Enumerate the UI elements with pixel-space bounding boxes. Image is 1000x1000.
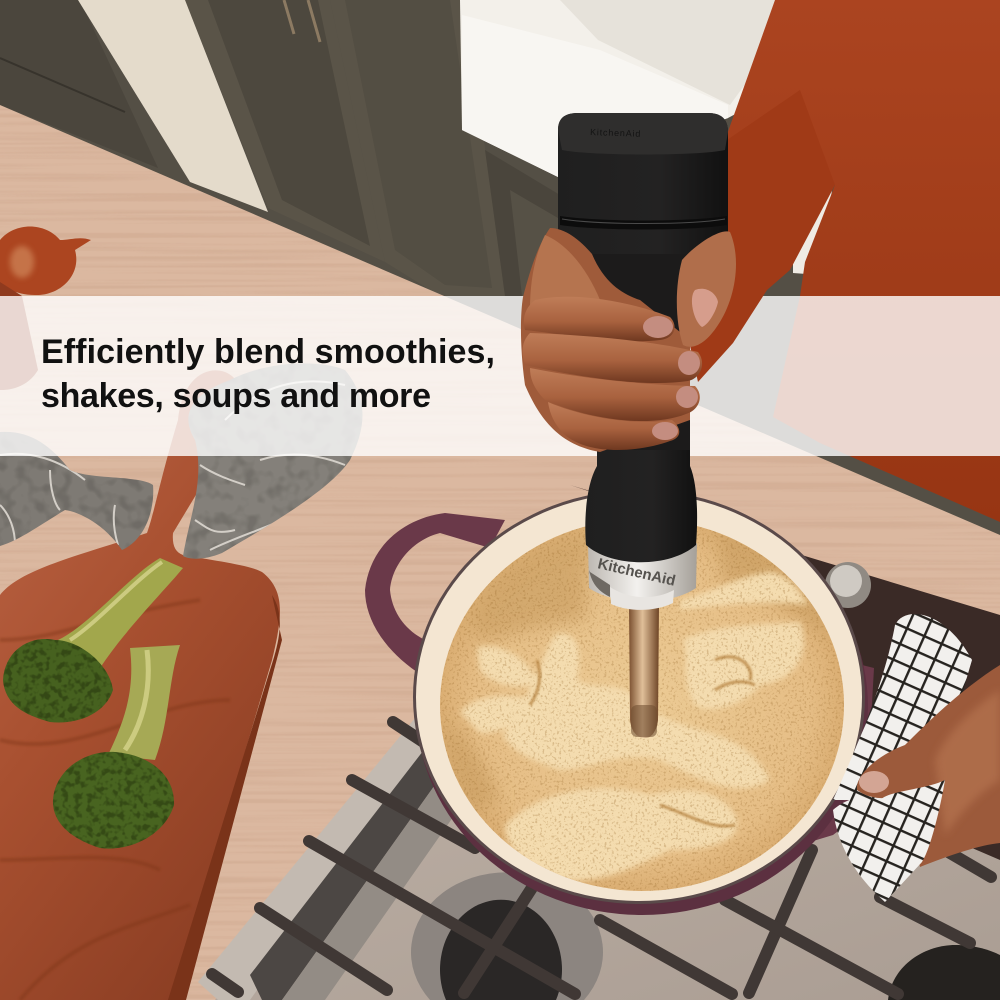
heading text <box>41 333 495 415</box>
dish towel upper <box>833 614 972 800</box>
white sink <box>460 0 780 178</box>
blender collar: KitchenAid <box>596 555 677 590</box>
heading text: Efficiently blend smoothies, <box>41 333 495 371</box>
cutting board <box>0 370 282 1000</box>
blender head: KitchenAid <box>590 127 641 139</box>
blender head <box>558 113 728 254</box>
blender grip <box>592 250 690 450</box>
hand gripping blender <box>521 228 736 452</box>
fold shadows <box>530 657 755 826</box>
white post <box>78 0 268 212</box>
light foam folds <box>460 572 808 881</box>
sweater sleeve <box>680 90 835 382</box>
stove <box>198 485 1000 1000</box>
dish towel lower <box>833 780 945 902</box>
right hand <box>857 665 1000 867</box>
heading text: shakes, soups and more <box>41 377 431 415</box>
back of hand <box>521 228 690 452</box>
soup surface <box>440 519 844 891</box>
blender collar <box>588 543 697 610</box>
onion <box>0 226 91 390</box>
fingernails <box>643 316 700 440</box>
little finger <box>548 402 679 450</box>
thumb <box>677 231 736 347</box>
blender lower body <box>585 440 697 562</box>
pot left handle <box>365 513 505 672</box>
darker soup zones <box>445 525 835 810</box>
foam speckle <box>440 515 845 895</box>
index finger <box>524 297 675 341</box>
broccoli stems <box>58 558 183 760</box>
broccoli crowns <box>3 639 174 849</box>
ring finger <box>530 368 700 421</box>
gray towels <box>0 360 370 570</box>
stove grates <box>212 722 991 994</box>
background: kitchen cabinets <box>0 0 1000 560</box>
sweater body <box>725 0 1000 522</box>
pot right handle <box>800 665 874 845</box>
blender shaft <box>629 604 659 738</box>
translucent band <box>0 296 1000 456</box>
middle finger <box>523 333 702 383</box>
pot <box>365 490 874 915</box>
